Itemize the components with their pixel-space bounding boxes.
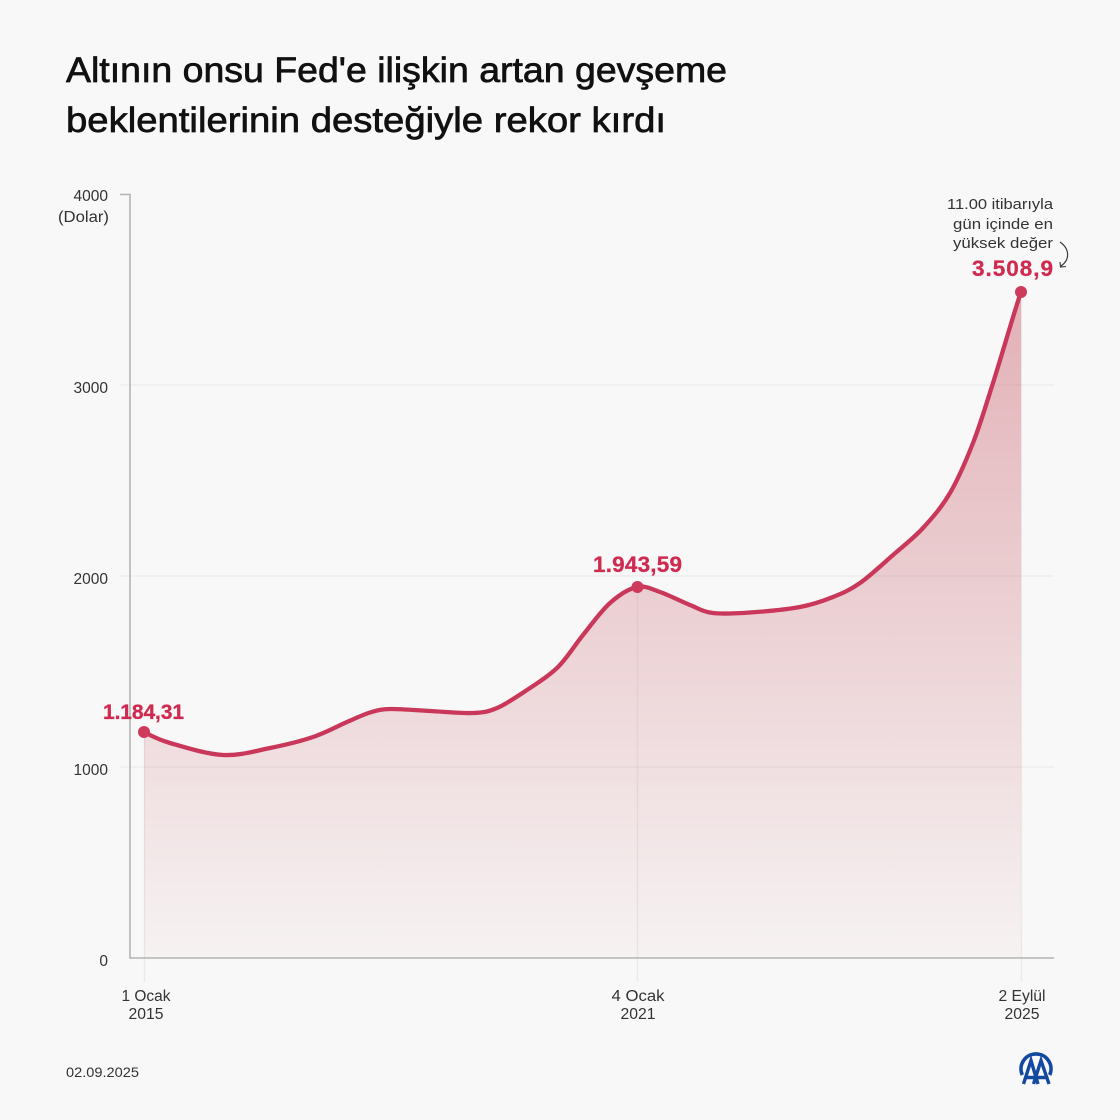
annotation: intraday high: gün içinde en bbox=[953, 216, 1053, 233]
date stamp: 02.09.2025 bbox=[66, 1064, 139, 1080]
x axis labels: 4 Ocak bbox=[612, 988, 665, 1005]
x axis labels: 2021 bbox=[620, 1006, 656, 1023]
y axis labels: 3000 bbox=[74, 380, 108, 397]
gridlines bbox=[120, 385, 1054, 767]
gold price line bbox=[144, 292, 1021, 755]
y axis labels: 4000 bbox=[74, 188, 108, 205]
logo: AA bbox=[1021, 1054, 1051, 1084]
x axis labels: 2025 bbox=[1004, 1006, 1040, 1023]
y axis labels: 0 bbox=[99, 953, 108, 970]
title bbox=[66, 51, 727, 140]
x axis labels: 2 Eylül bbox=[998, 988, 1046, 1005]
x axis labels bbox=[122, 988, 1046, 1023]
annotation: intraday high: yüksek değer bbox=[953, 235, 1053, 252]
y axis labels: 2000 bbox=[74, 571, 108, 588]
value labels: 3.508,9 bbox=[972, 256, 1053, 281]
x axis labels: 2015 bbox=[128, 1006, 164, 1023]
y axis labels: (Dolar) bbox=[58, 209, 109, 226]
value labels: 1.943,59 bbox=[593, 552, 682, 577]
x axis labels: 1 Ocak bbox=[122, 988, 171, 1005]
axes bbox=[120, 194, 1054, 958]
annotation: intraday high bbox=[947, 196, 1054, 252]
title: Altının onsu Fed'e ilişkin artan gevşeme bbox=[66, 51, 727, 90]
annotation arrow bbox=[1060, 242, 1068, 267]
value labels: 1.184,31 bbox=[103, 701, 184, 724]
annotation: intraday high: 11.00 itibarıyla bbox=[947, 196, 1054, 213]
date guide lines bbox=[144, 295, 1022, 982]
value labels bbox=[103, 256, 1053, 724]
y axis labels: 1000 bbox=[74, 762, 108, 779]
y axis labels bbox=[58, 188, 109, 970]
data points bbox=[138, 286, 1027, 738]
area under gold price curve bbox=[144, 292, 1021, 958]
title: beklentilerinin desteğiyle rekor kırdı bbox=[66, 101, 666, 140]
